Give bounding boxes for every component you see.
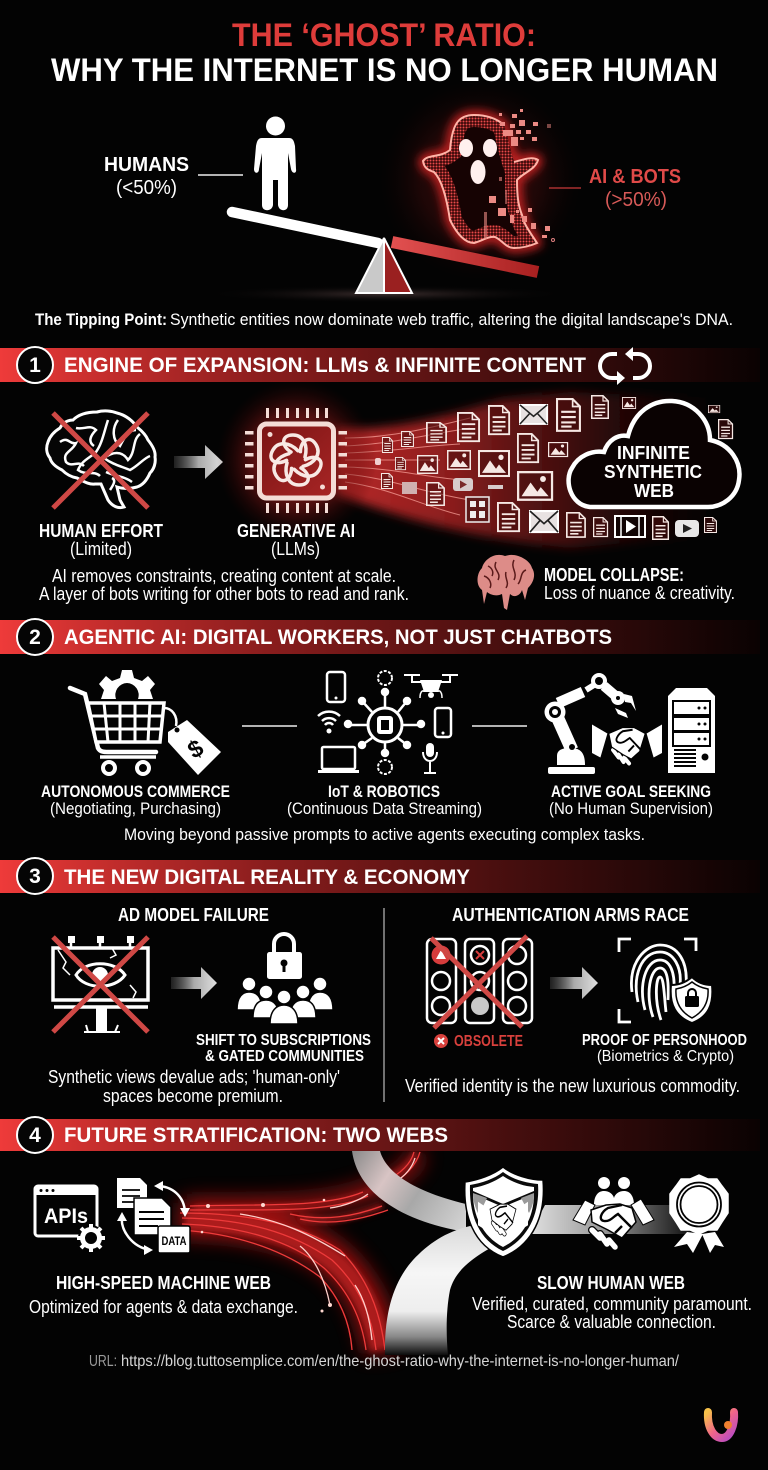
connector line	[242, 725, 297, 727]
arrow: effort to ai	[174, 445, 223, 479]
caption: autonomous commerce	[41, 782, 230, 818]
humans label: HUMANS	[104, 154, 189, 176]
caption: slow human web: SLOW HUMAN WEB	[537, 1273, 685, 1293]
caption: generative ai: GENERATIVE AI	[237, 521, 355, 541]
caption: slow human web	[472, 1273, 752, 1332]
icon: iot hub network	[318, 671, 458, 774]
section 1 header bar: 1	[29, 354, 41, 377]
ai and bots label: AI & BOTS	[589, 166, 681, 188]
caption: high speed machine web: Optimized for agents & data exchange.	[29, 1297, 298, 1317]
source url: https://blog.tuttosemplice.com/en/the-ghost-ratio-why-the-internet-is-no-longer-human/	[121, 1353, 680, 1370]
caption: generative ai: (LLMs)	[271, 539, 320, 559]
icon: human figure	[254, 116, 296, 210]
icon: lock over community	[237, 934, 333, 1024]
caption: shift to subscriptions: & GATED COMMUNITIES	[205, 1048, 364, 1065]
icon: fingerprint and shield	[619, 939, 712, 1023]
text: synthetic views: Synthetic views devalue ads; 'human-only'	[48, 1067, 340, 1087]
icons: synthetic documents, images and mail	[375, 396, 732, 539]
title	[51, 17, 718, 88]
icon: captcha grid crossed out	[427, 936, 532, 1028]
icon: generative ai chip	[217, 380, 377, 540]
icon: apis window with gear: APIs	[44, 1205, 88, 1228]
connector line	[472, 725, 527, 727]
callout: model collapse: MODEL COLLAPSE:	[544, 565, 684, 585]
logo	[708, 1412, 734, 1438]
icon: ribbon badge	[670, 1175, 728, 1253]
icon: refresh loop	[600, 347, 650, 385]
section 2 header bar: AGENTIC AI: DIGITAL WORKERS, NOT JUST CHATBOTS	[64, 626, 612, 649]
arrow: captcha to biometrics	[550, 967, 598, 999]
section 1 header bar: ENGINE OF EXPANSION: LLMs & INFINITE CONTENT	[64, 354, 586, 377]
icon: data documents exchange	[117, 1178, 190, 1255]
icon: apis window with gear	[35, 1186, 105, 1252]
caption: generative ai	[237, 521, 355, 559]
panel: section 2 agentic ai	[0, 619, 760, 844]
icon: melting brain	[478, 555, 534, 610]
tipping point statement: The Tipping Point:	[35, 310, 167, 329]
ai and bots label: (>50%)	[605, 189, 667, 211]
humans label	[104, 154, 243, 199]
title: WHY THE INTERNET IS NO LONGER HUMAN	[51, 52, 718, 88]
text: synthetic views: spaces become premium.	[103, 1086, 283, 1106]
panel: section 4 future stratification	[0, 1117, 760, 1355]
section 4 header bar: FUTURE STRATIFICATION: TWO WEBS	[64, 1124, 448, 1147]
icon: broken billboard crossed out	[53, 936, 148, 1032]
icon: red ghost	[398, 99, 561, 261]
humans label: (<50%)	[116, 177, 177, 199]
section 4 header bar	[0, 1117, 760, 1153]
caption: iot and robotics: IoT & ROBOTICS	[328, 782, 440, 801]
cloud: infinite synthetic web	[569, 401, 739, 507]
caption: shift to subscriptions	[196, 1032, 371, 1065]
caption: proof of personhood	[582, 1032, 747, 1065]
text: ai removes constraints: A layer of bots writing for other bots to read and rank.	[39, 584, 409, 604]
caption: high speed machine web	[29, 1273, 298, 1317]
caption: active goal seeking	[549, 782, 713, 818]
panel: section 1 engine of expansion	[0, 347, 760, 610]
caption: human effort	[39, 521, 163, 559]
icon: shopping cart with gear and price tag: $	[183, 734, 209, 765]
callout: model collapse	[544, 565, 735, 603]
section 3 header bar	[0, 858, 760, 894]
machine web light streaks	[180, 1152, 420, 1352]
icon: verified shield with handshake	[465, 1167, 543, 1257]
section 2 header bar: 2	[29, 626, 41, 649]
icon: people with handshake	[573, 1177, 654, 1247]
ai and bots label	[549, 166, 681, 211]
cloud: infinite synthetic web: WEB	[634, 481, 674, 501]
panel: section 3 new digital reality	[0, 858, 760, 1106]
cloud: infinite synthetic web: INFINITE	[617, 443, 690, 463]
icon: shopping cart with gear and price tag	[70, 670, 221, 775]
section 2 header bar	[0, 619, 760, 655]
heading: ad model failure: AD MODEL FAILURE	[118, 905, 269, 925]
caption: iot and robotics	[287, 782, 482, 818]
caption: high speed machine web: HIGH-SPEED MACHINE WEB	[56, 1273, 271, 1293]
caption: autonomous commerce: (Negotiating, Purchasing)	[50, 799, 221, 818]
text: ai removes constraints: AI removes constraints, creating content at scale.	[52, 566, 396, 586]
caption: human effort: HUMAN EFFORT	[39, 521, 163, 541]
caption: active goal seeking: ACTIVE GOAL SEEKING	[551, 782, 711, 801]
text: synthetic views	[48, 1067, 340, 1106]
caption: proof of personhood: (Biometrics & Crypto)	[597, 1048, 734, 1065]
tipping point statement: Synthetic entities now dominate web traffic, altering the digital landscape's DNA.	[170, 310, 733, 329]
caption: active goal seeking: (No Human Supervision)	[549, 799, 713, 818]
arrow: ads to subscriptions	[171, 967, 217, 999]
section 1 header bar	[0, 347, 760, 383]
caption: iot and robotics: (Continuous Data Streaming)	[287, 799, 482, 818]
cloud: infinite synthetic web: SYNTHETIC	[604, 462, 702, 482]
seesaw beam and fulcrum	[232, 212, 538, 293]
callout: model collapse: Loss of nuance & creativity.	[544, 583, 735, 603]
icon: crossed out brain	[47, 411, 155, 508]
text: moving beyond passive prompts: Moving beyond passive prompts to active agents executing complex tasks.	[124, 825, 645, 844]
caption: shift to subscriptions: SHIFT TO SUBSCRIPTIONS	[196, 1032, 371, 1049]
section 3 header bar: THE NEW DIGITAL REALITY & ECONOMY	[64, 866, 470, 889]
human web road	[352, 1151, 690, 1355]
caption: slow human web: Scarce & valuable connection.	[507, 1312, 716, 1332]
section 4 header bar: 4	[29, 1124, 41, 1147]
icon: robot arm, handshake and server	[544, 673, 715, 774]
red data stream	[336, 392, 720, 548]
label: obsolete: OBSOLETE	[454, 1033, 523, 1050]
source url: URL:	[89, 1353, 117, 1370]
section 3 header bar: 3	[29, 865, 41, 888]
text: ai removes constraints	[39, 566, 409, 604]
panel: tipping scale hero	[105, 99, 680, 300]
label: obsolete	[434, 1033, 523, 1050]
caption: autonomous commerce: AUTONOMOUS COMMERCE	[41, 782, 230, 801]
heading: authentication arms race: AUTHENTICATION ARMS RACE	[452, 905, 689, 925]
icon: data documents exchange: DATA	[162, 1234, 187, 1248]
caption: human effort: (Limited)	[70, 539, 132, 559]
title: THE ‘GHOST’ RATIO:	[232, 17, 536, 53]
